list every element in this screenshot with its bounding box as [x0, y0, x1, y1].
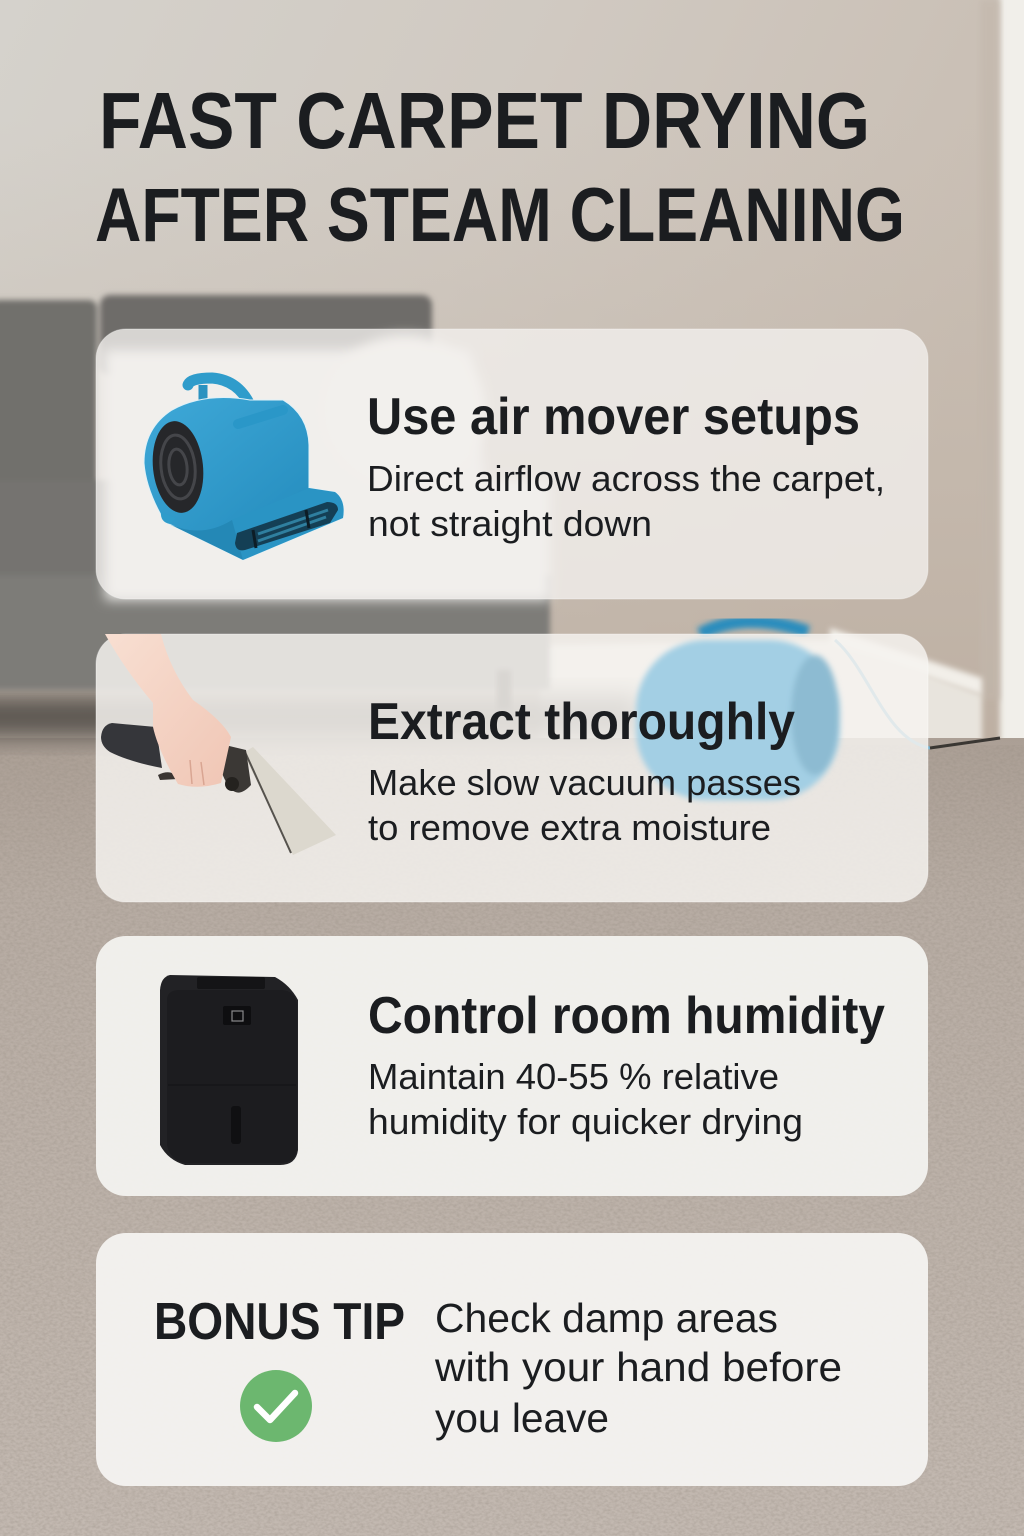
body text: Make slow vacuum passes	[368, 762, 801, 803]
icon: green check mark	[240, 1370, 312, 1442]
body text: you leave	[435, 1395, 609, 1441]
panel: extract thoroughly	[96, 634, 928, 902]
title: FAST CARPET DRYING	[99, 76, 870, 165]
heading: Control room humidity	[368, 987, 885, 1045]
body text: Check damp areas	[435, 1295, 778, 1341]
heading: Extract thoroughly	[368, 693, 795, 751]
body text: Maintain 40-55 % relative	[368, 1056, 779, 1097]
body text	[368, 762, 801, 848]
body text: not straight down	[368, 503, 652, 544]
panel: use air mover setups	[96, 329, 928, 599]
body text: with your hand before	[434, 1344, 842, 1390]
icon: hand holding extraction wand	[101, 634, 336, 855]
body text	[368, 1056, 803, 1142]
heading: bonus tip: BONUS TIP	[154, 1293, 405, 1351]
body text	[434, 1295, 842, 1441]
icon: blue air mover	[144, 378, 344, 560]
panel: control room humidity	[96, 936, 928, 1196]
body text: humidity for quicker drying	[368, 1101, 803, 1142]
body text: Direct airflow across the carpet,	[367, 458, 885, 499]
panel: bonus tip	[96, 1233, 928, 1486]
heading: Use air mover setups	[367, 388, 860, 446]
blurred air mover behind the card	[636, 640, 840, 800]
title	[95, 76, 905, 258]
icon: black dehumidifier	[160, 975, 298, 1165]
body text: to remove extra moisture	[368, 807, 771, 848]
body text	[367, 458, 885, 544]
